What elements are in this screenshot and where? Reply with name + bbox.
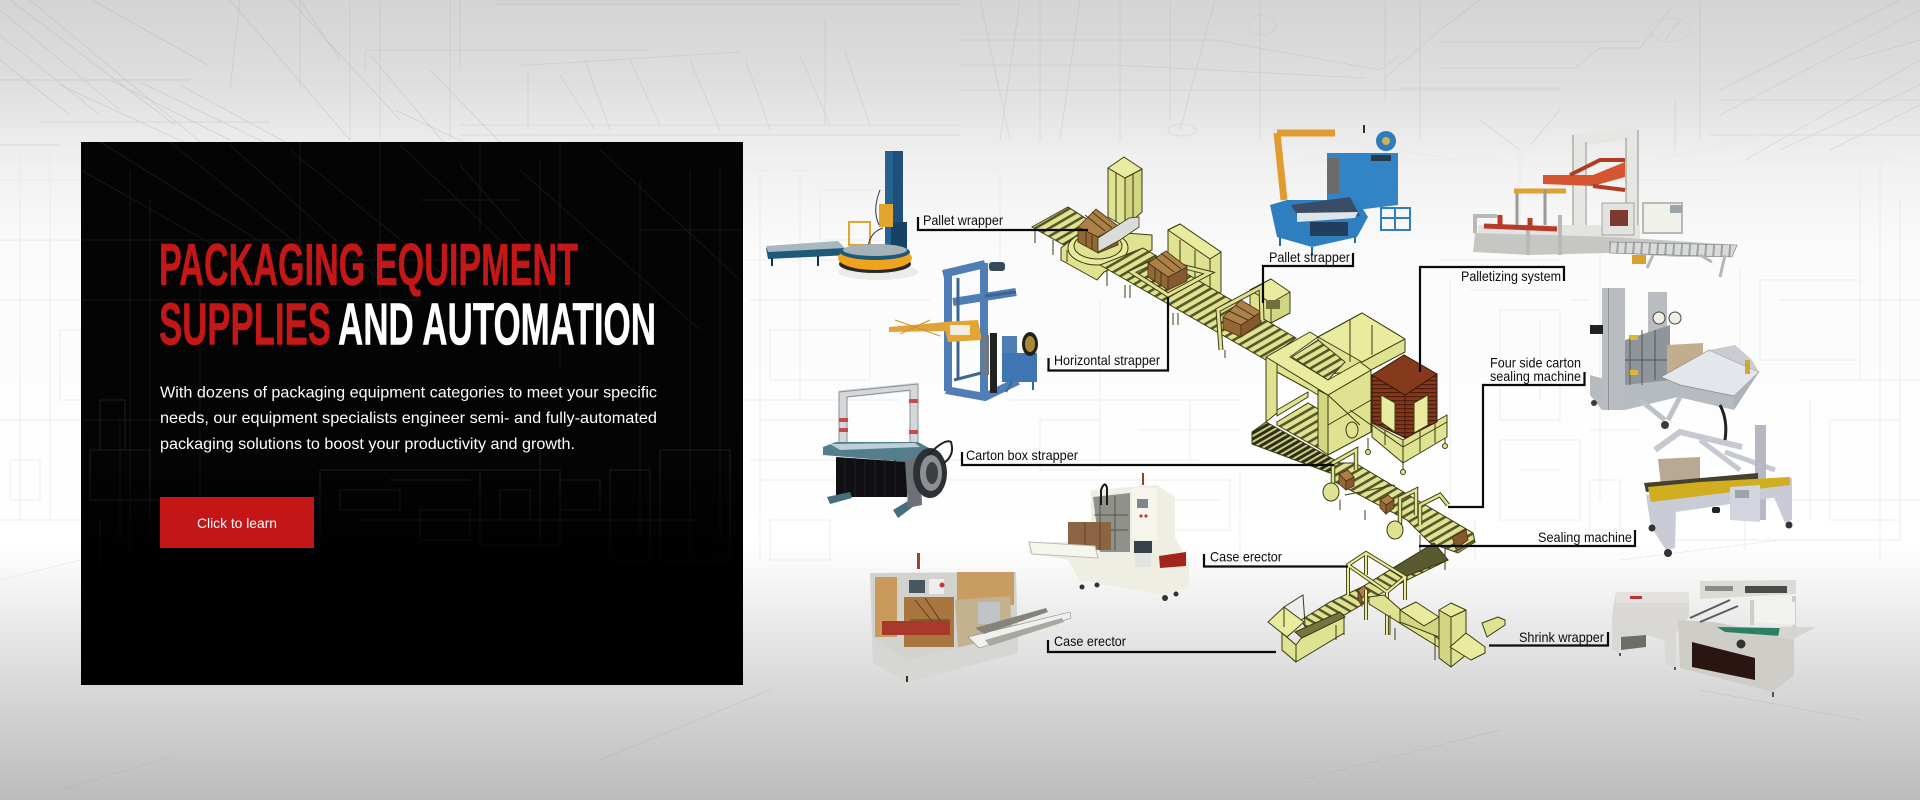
callout: pallet strapper: Pallet strapper [1269,249,1350,265]
callout: pallet strapper [1263,249,1353,303]
intro paragraph: With dozens of packaging equipment categories to meet your specific [160,384,657,402]
brown pallet stack and platform [1366,355,1448,474]
first strapper station [1168,224,1221,298]
callout: four side carton sealing machine: sealing machine [1490,368,1581,384]
shrink branch blocks [1369,595,1505,667]
palletizer arch [1266,332,1371,455]
intro paragraph: needs, our equipment specialists engineer semi- and fully-automated [160,410,657,427]
callout: horizontal strapper: Horizontal strapper [1054,352,1160,368]
strapper frame and cartons [1132,251,1262,350]
callout: palletizing system: Palletizing system [1461,268,1561,284]
callout: case erector upper [1204,548,1348,566]
machine: shrink wrapper [1612,580,1816,697]
machine: case erector white [1029,473,1189,601]
panel: intro block [81,142,743,685]
callout: case erector upper: Case erector [1210,548,1282,564]
callout: carton box strapper [962,447,1334,465]
wrapper station [1032,157,1152,280]
callout: carton box strapper: Carton box strapper [966,447,1078,463]
lower conveyor [1323,450,1475,570]
callout: four side carton sealing machine: Four side carton [1490,354,1581,370]
case erector station [1268,595,1345,662]
machine: horizontal strapper [889,262,1038,397]
callout: sealing machine: Sealing machine [1538,529,1632,545]
callout: horizontal strapper [1048,297,1168,370]
callout: shrink wrapper [1489,629,1608,646]
diagram: yellow isometric packaging line [1032,157,1505,667]
callout: case erector lower: Case erector [1054,633,1126,649]
machine: carton box strapper [823,384,952,518]
heading: PACKAGING EQUIPMENT [159,232,578,298]
heading [159,232,656,358]
callout: shrink wrapper: Shrink wrapper [1519,629,1604,645]
machine: sealing machine [1644,405,1792,557]
machine: pallet strapper [1270,125,1410,255]
palletizer floor [1252,363,1340,473]
down-left conveyor branch [1301,543,1448,633]
palletizer tower [1292,313,1405,380]
second strapper cabinet [1250,279,1290,323]
callout: case erector lower [1048,633,1276,652]
heading: AND AUTOMATION [338,292,656,358]
heading: SUPPLIES [159,292,331,358]
button: click to learn [160,497,314,548]
callout: sealing machine [1419,529,1635,546]
main roller conveyor [1100,248,1296,360]
machine: case erector cardboard [870,553,1071,682]
callout: palletizing system [1420,267,1564,372]
machine: pallet wrapper [766,151,918,280]
case erector frame [1348,553,1405,635]
button: click to learn: Click to learn [197,515,277,531]
callout: pallet wrapper: Pallet wrapper [923,212,1003,228]
callout: pallet wrapper [918,212,1088,230]
machine: palletizing system [1473,130,1737,277]
callout: four side carton sealing machine [1448,354,1584,507]
intro paragraph [160,384,657,453]
intro paragraph: packaging solutions to boost your productivity and growth. [160,436,575,453]
machine: four side carton sealer [1590,288,1759,429]
